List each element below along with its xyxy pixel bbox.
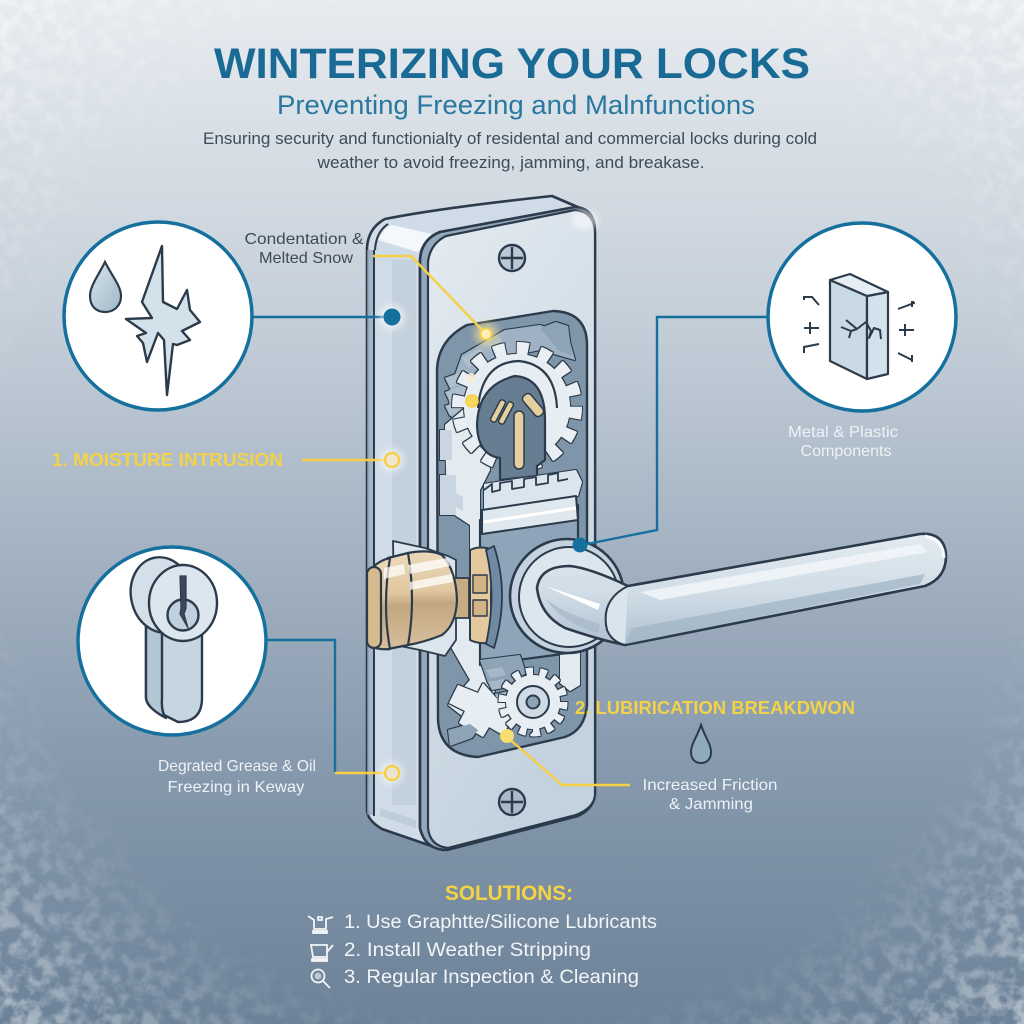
connector: moisture heading xyxy=(302,449,403,471)
lower gears xyxy=(448,653,580,746)
solutions list xyxy=(344,912,657,988)
screw: top xyxy=(499,245,525,271)
connector: condensation to mechanism xyxy=(373,256,497,345)
callout: grease label: Degrated Grease & Oil xyxy=(158,758,316,775)
icon: stress marks xyxy=(804,297,914,362)
connector: moisture circle to plate xyxy=(252,305,404,329)
solutions panel xyxy=(308,882,657,988)
intro text: weather to avoid freezing, jamming, and breakase. xyxy=(316,153,704,172)
brass cylinder xyxy=(367,541,502,656)
callout: friction label xyxy=(642,777,778,813)
callout 1: moisture icon circle xyxy=(64,222,252,410)
icon: cracked ice xyxy=(126,246,200,395)
left linkage column xyxy=(440,395,495,730)
subtitle: Preventing Freezing and Malnfunctions xyxy=(277,90,755,120)
callout: grease label xyxy=(158,758,316,796)
callout: condensation label: Melted Snow xyxy=(259,250,353,267)
mechanism window xyxy=(437,311,587,757)
title: WINTERIZING YOUR LOCKS xyxy=(214,40,810,88)
callout: grease label: Freezing in Keway xyxy=(168,779,304,796)
icon: oil can xyxy=(308,916,333,933)
icon: weather strip xyxy=(311,945,333,961)
connector: lower gear to friction label xyxy=(500,729,630,785)
icon: cracked block xyxy=(830,274,888,379)
screw: bottom xyxy=(499,789,525,815)
icon: euro cylinder xyxy=(124,551,217,722)
heading: moisture intrusion: 1. MOISTURE INTRUSION xyxy=(52,450,283,470)
callout: friction label: & Jamming xyxy=(669,796,753,813)
solutions list: 3. Regular Inspection & Cleaning xyxy=(344,967,639,988)
intro text xyxy=(203,129,817,172)
solutions list: 2. Install Weather Stripping xyxy=(344,940,591,961)
heading: lubrication breakdown: 2. LUBIRICATION BREAKDWON xyxy=(575,698,855,718)
callout: metal label: Metal & Plastic xyxy=(788,424,898,441)
callout: keyway circle xyxy=(78,547,266,735)
lock illustration xyxy=(367,196,946,850)
callout: metal label: Components xyxy=(800,443,892,460)
lever handle xyxy=(510,534,946,653)
icon: water drop xyxy=(90,262,121,312)
brass pins xyxy=(490,392,545,469)
connector: grease label to plate xyxy=(335,762,403,784)
intro text: Ensuring security and functionialty of residental and commercial locks during cold xyxy=(203,129,817,148)
icon: magnifier xyxy=(312,970,330,988)
callout: condensation label xyxy=(244,231,364,267)
upper dark gear xyxy=(445,322,575,420)
large gear xyxy=(459,349,575,480)
solutions list: 1. Use Graphtte/Silicone Lubricants xyxy=(344,912,657,933)
connector: keyway circle to label xyxy=(266,640,335,772)
callout: metal block circle xyxy=(768,223,956,411)
mechanism frost dots xyxy=(466,373,478,407)
connector: metal circle to handle xyxy=(572,317,768,552)
callout: metal label xyxy=(788,424,898,460)
callout: condensation label: Condentation & xyxy=(244,231,364,248)
back side plate xyxy=(367,196,580,850)
front plate xyxy=(420,207,599,850)
middle housing xyxy=(480,470,582,665)
icon: oil drop xyxy=(691,725,711,763)
callout: friction label: Increased Friction xyxy=(642,777,778,794)
solutions heading: SOLUTIONS: xyxy=(445,882,573,905)
